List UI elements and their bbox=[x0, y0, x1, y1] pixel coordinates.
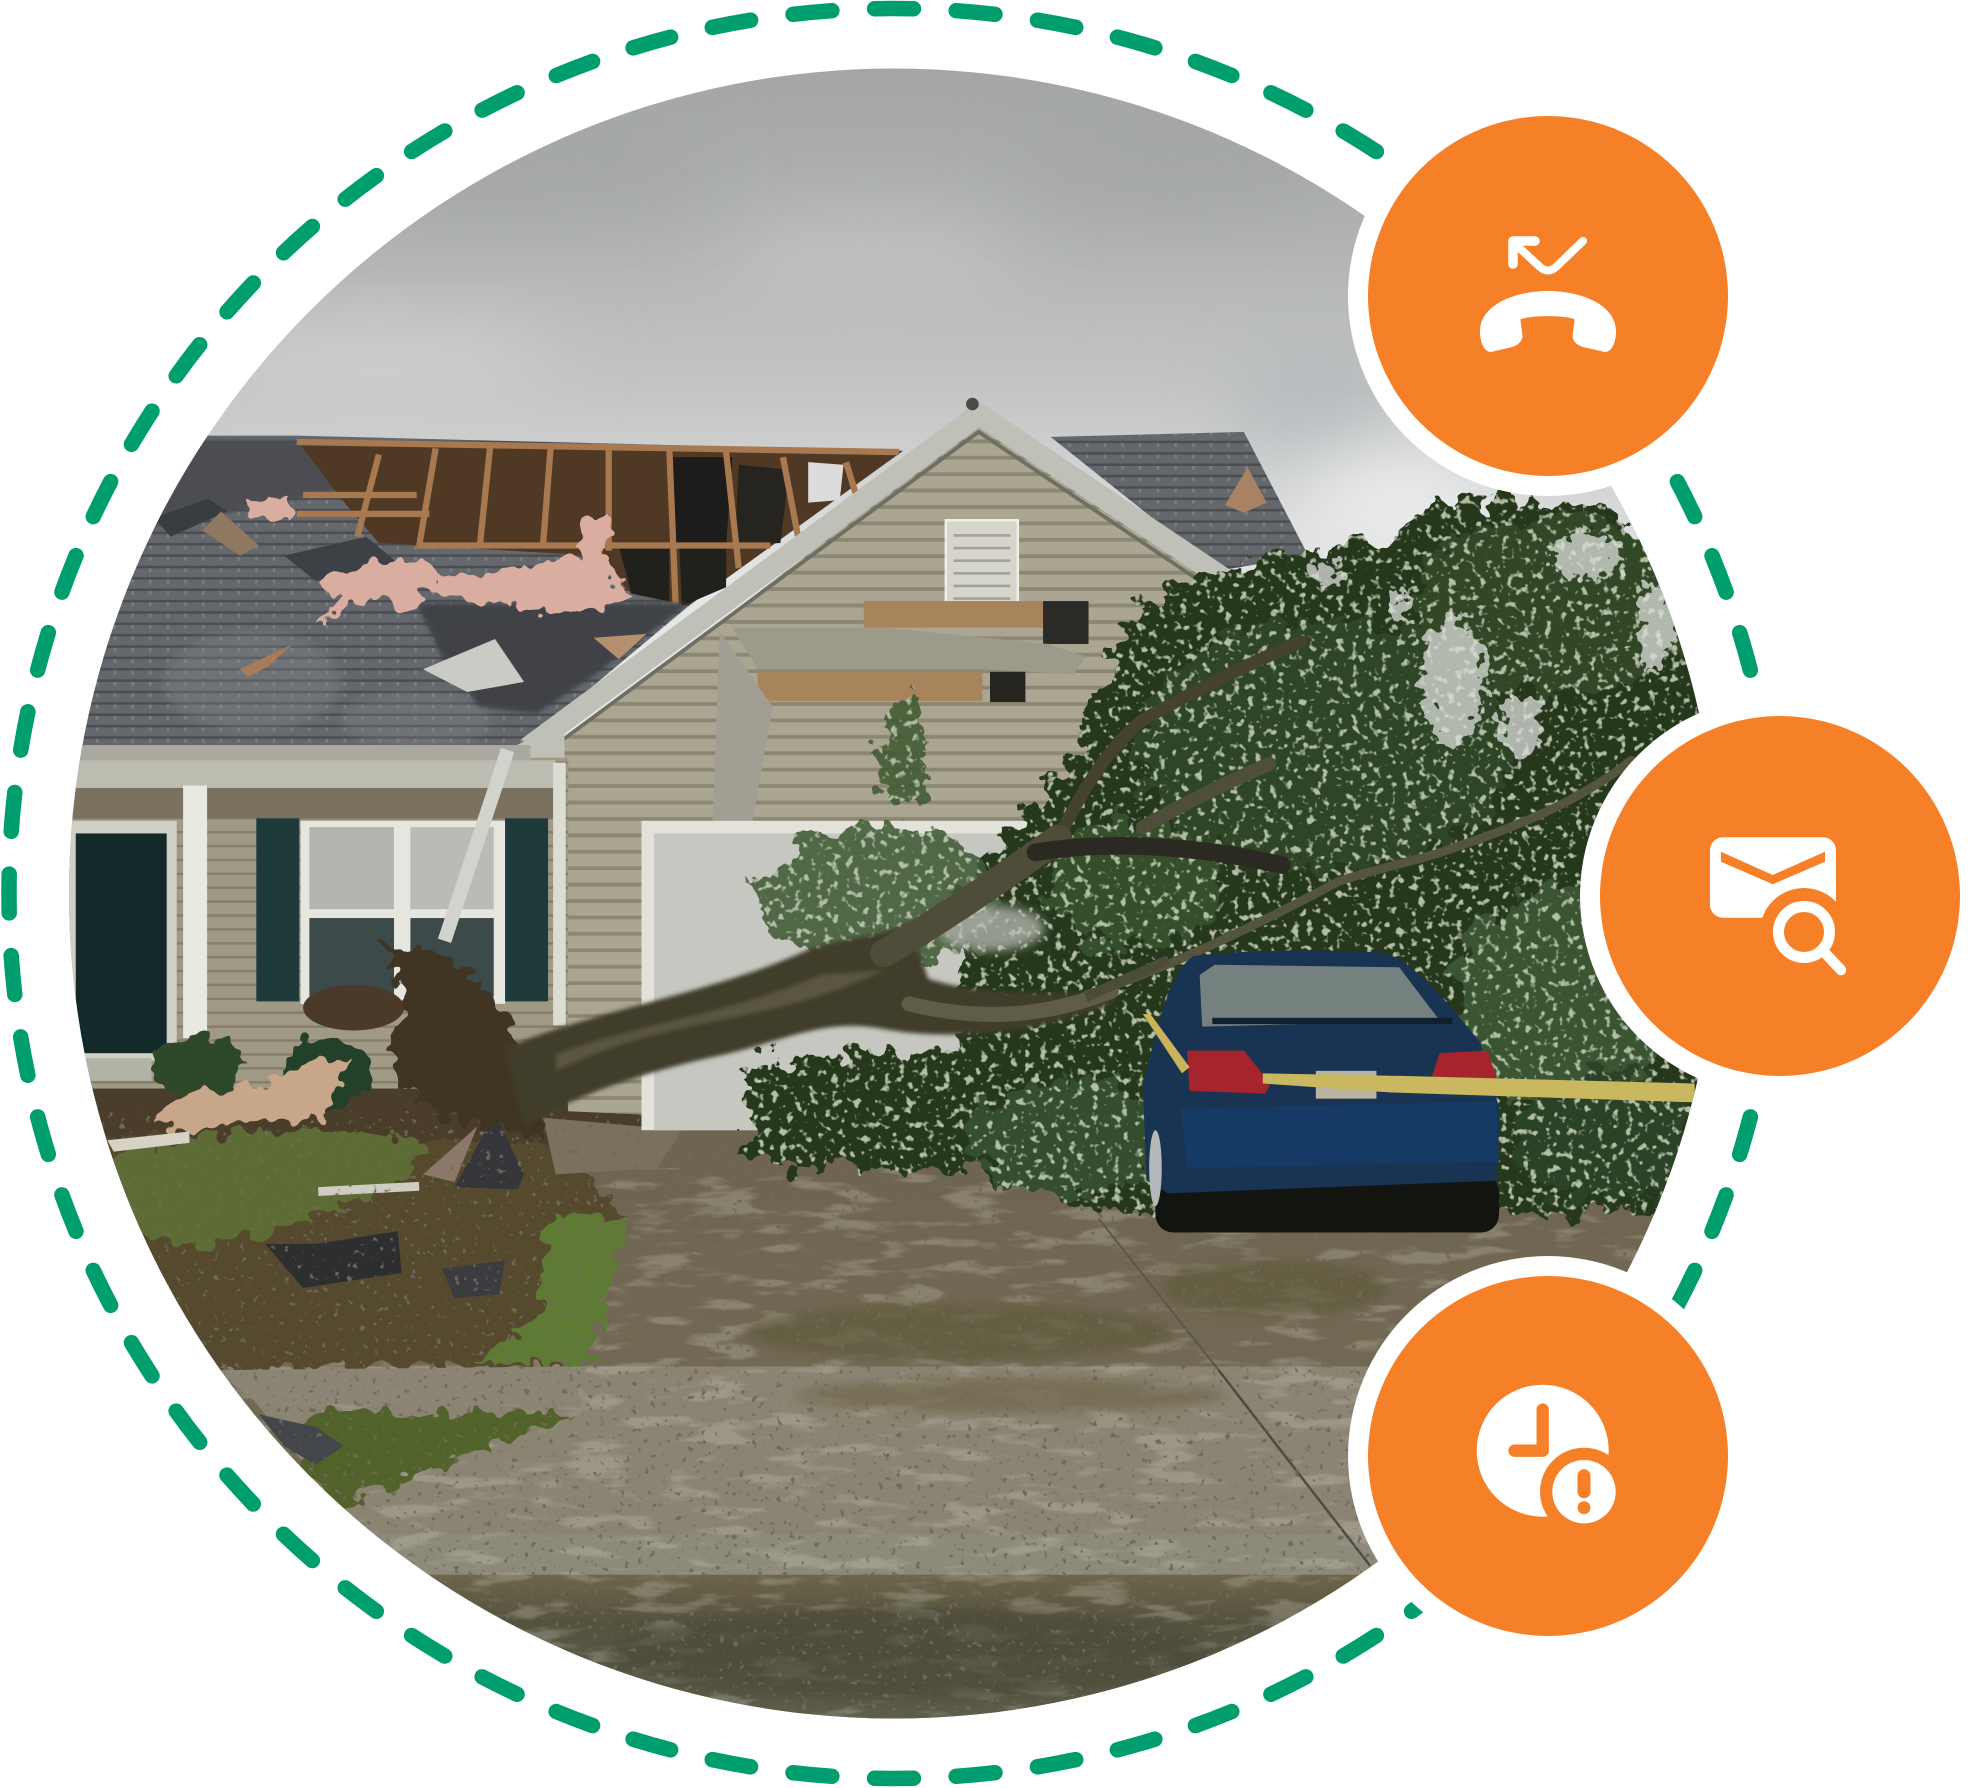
gable siding wall bbox=[564, 428, 1197, 1114]
front door bbox=[63, 821, 177, 1061]
porch plinth bbox=[76, 1058, 152, 1081]
badge disc bbox=[1368, 1276, 1728, 1636]
sky bbox=[126, 68, 1644, 741]
badge disc bbox=[1368, 116, 1728, 476]
icon: exclamation bar bbox=[1578, 1469, 1590, 1498]
right rear roof bbox=[1051, 432, 1308, 571]
torn shingles bbox=[154, 499, 688, 713]
branches across the car bbox=[1086, 960, 1168, 998]
icon: clock hands bbox=[1514, 1410, 1543, 1451]
badge ring bbox=[1580, 696, 1980, 1096]
mulch bed by the porch bbox=[63, 1073, 657, 1162]
wall trim bbox=[553, 763, 566, 1025]
icon: exclamation dot bbox=[1578, 1501, 1590, 1514]
broken shutter brown patch bbox=[303, 985, 404, 1030]
attic vent bbox=[946, 520, 1018, 612]
tree trunk and limbs bbox=[505, 642, 1632, 1126]
right shutter bbox=[505, 818, 548, 1001]
license plate bbox=[1316, 1071, 1376, 1099]
icon: magnifier bbox=[1778, 906, 1841, 970]
badge ring bbox=[1348, 96, 1748, 496]
porch bbox=[51, 745, 568, 1089]
wheel bbox=[1149, 1130, 1162, 1206]
badge: declined call bbox=[1348, 96, 1748, 496]
hanging torn panel bbox=[712, 632, 772, 821]
lower siding by garage bbox=[568, 833, 642, 1105]
caution tape bbox=[1143, 1014, 1695, 1102]
garage door bbox=[642, 821, 1065, 1130]
insulation on lawn bbox=[152, 1054, 351, 1131]
lawn with debris bbox=[63, 1111, 1705, 1717]
car shadow bbox=[1155, 1174, 1499, 1232]
left shutter bbox=[256, 818, 299, 1001]
trunk bark highlight bbox=[556, 970, 884, 1071]
fallen downspout bbox=[445, 750, 508, 941]
alert cutout bbox=[1540, 1448, 1628, 1536]
icon: clock face bbox=[1477, 1385, 1609, 1517]
icon: envelope flap bbox=[1721, 852, 1825, 884]
sky gaps through the branches bbox=[1308, 533, 1672, 759]
exposed rafters bbox=[297, 439, 903, 606]
blue car bbox=[1143, 950, 1500, 1232]
window bbox=[301, 821, 505, 1004]
torn pink insulation bbox=[242, 495, 634, 619]
uprooted root ball bbox=[376, 941, 546, 1137]
car body bbox=[1143, 950, 1500, 1193]
icon: alert circle bbox=[1552, 1460, 1616, 1523]
torn siding with exposed plywood bbox=[732, 601, 1089, 702]
gable roof trim bbox=[511, 398, 1231, 760]
plank debris bbox=[107, 1131, 189, 1152]
right tail light bbox=[1429, 1051, 1498, 1083]
driveway and ground bbox=[63, 1111, 1768, 1733]
badge: email search bbox=[1580, 696, 1980, 1096]
left tail light bbox=[1187, 1051, 1270, 1094]
icon: envelope bbox=[1710, 837, 1836, 918]
magnifier cutout bbox=[1760, 888, 1848, 976]
rear window bbox=[1200, 965, 1440, 1027]
main roof bbox=[51, 436, 903, 758]
porch post bbox=[183, 785, 207, 1038]
roof damage patch bbox=[1225, 467, 1267, 513]
left foliage cluster bbox=[758, 688, 998, 966]
wall lamp bbox=[599, 838, 614, 873]
bushes bbox=[148, 1035, 369, 1111]
bumper bbox=[1181, 1101, 1499, 1168]
icon: missed call arrow bbox=[1513, 241, 1583, 270]
garage door visible through the branches bbox=[938, 905, 1044, 951]
badge disc bbox=[1600, 716, 1960, 1076]
spoiler bbox=[1212, 1018, 1452, 1024]
tree foliage back layer bbox=[739, 499, 1743, 1212]
badge: overdue clock bbox=[1348, 1256, 1748, 1656]
icon: handset bbox=[1480, 291, 1616, 352]
badge ring bbox=[1348, 1256, 1748, 1656]
